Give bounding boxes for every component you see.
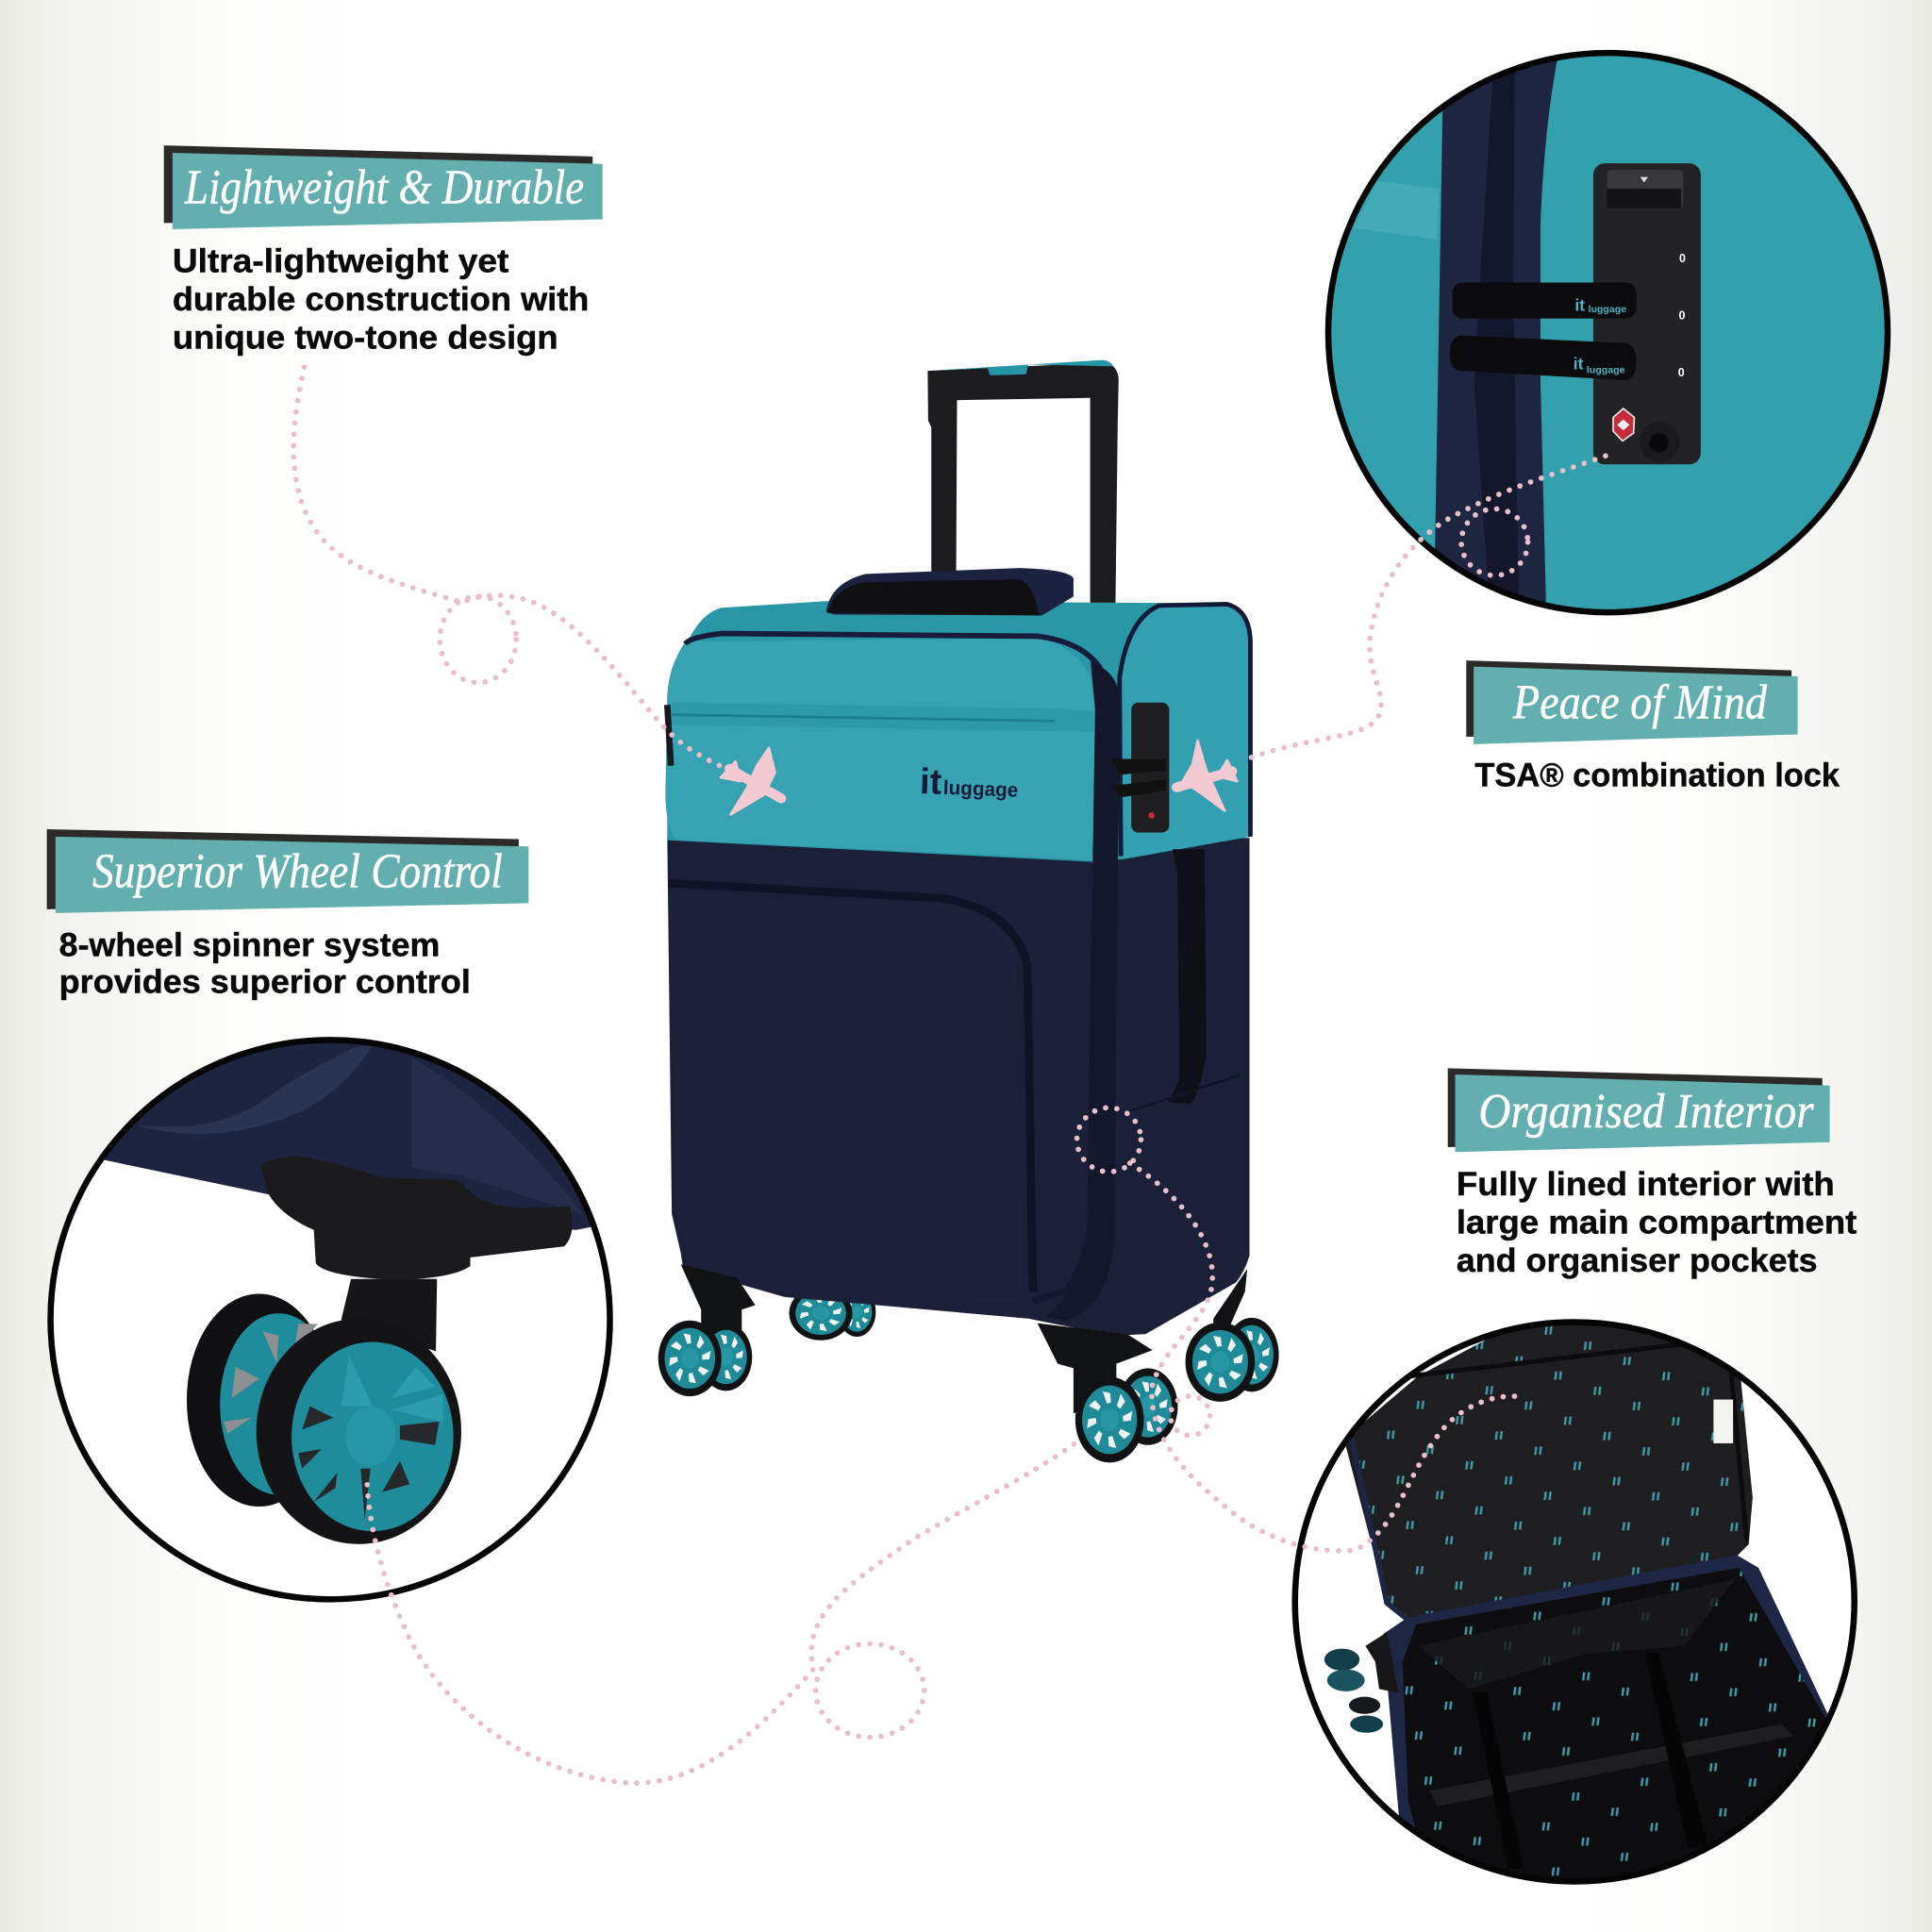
heading: Organised Interior xyxy=(1448,1068,1830,1152)
icon: tsa lock xyxy=(1110,703,1169,833)
zipper tag 1: it xyxy=(1574,295,1585,314)
text: Lightweight: durable construction with xyxy=(173,281,589,318)
text: TSA: TSA® combination lock xyxy=(1474,757,1840,793)
text: interior: large main compartment xyxy=(1457,1204,1857,1241)
pocket tab xyxy=(1353,181,1439,240)
wheel: front left xyxy=(658,1321,752,1396)
lock body: 0 xyxy=(1679,308,1686,322)
front navy pocket xyxy=(668,883,1097,1305)
lock body: 0 xyxy=(1678,366,1685,379)
panel: wheel photo xyxy=(47,1037,613,1603)
text: Lightweight xyxy=(173,243,589,357)
zipper tag 2: luggage xyxy=(1587,366,1625,376)
text: interior: Fully lined interior with xyxy=(1457,1166,1835,1203)
casters xyxy=(681,1264,1247,1413)
heading: Peace of Mind: Peace of Mind xyxy=(1512,675,1768,729)
white backdrop xyxy=(54,1160,162,1538)
rear wheel xyxy=(187,1294,318,1507)
zipper tag 2: it xyxy=(1574,355,1584,374)
logo: it luggage: luggage xyxy=(942,777,1019,802)
text: wheels: 8-wheel spinner system xyxy=(59,927,440,964)
text: wheels xyxy=(59,927,471,1001)
lock body xyxy=(1593,163,1701,464)
heading: Lightweight & Durable: Lightweight & Durable xyxy=(184,160,584,215)
dotted path: interior xyxy=(1077,1108,1524,1551)
lock body: 0 xyxy=(1679,252,1686,265)
body side seam xyxy=(1124,1074,1241,1113)
zipper tag 2 xyxy=(1450,335,1637,380)
wheel: front centre xyxy=(1075,1368,1177,1462)
main zipper column xyxy=(1046,662,1120,1321)
logo: it luggage xyxy=(919,761,1019,806)
zipper tag 1: luggage xyxy=(1589,305,1627,315)
suitcase xyxy=(658,360,1279,1462)
heading: Superior Wheel Control xyxy=(47,829,528,913)
wheel: front right xyxy=(1186,1318,1279,1402)
caster fork xyxy=(261,1157,573,1280)
caster stem xyxy=(341,1279,437,1351)
icon: telescopic handle xyxy=(927,360,1119,606)
open lid lining xyxy=(1346,1318,1753,1619)
text: interior: and organiser pockets xyxy=(1457,1242,1818,1279)
suitcase base lining xyxy=(1383,1556,1829,1912)
panel: lock photo xyxy=(1324,49,1890,615)
icon: plane right xyxy=(1176,741,1237,810)
dotted path: wheel xyxy=(367,1396,1210,1783)
front wheel xyxy=(257,1319,461,1544)
heading: Peace of Mind xyxy=(1466,660,1798,744)
zipper band xyxy=(1435,56,1558,615)
heading: Lightweight & Durable xyxy=(164,145,603,229)
suitcase navy body xyxy=(667,838,1250,1336)
logo: it luggage: it xyxy=(919,761,942,803)
text: interior xyxy=(1457,1166,1857,1279)
heading: Superior Wheel Control: Superior Wheel Control xyxy=(92,843,503,898)
text: Lightweight: Ultra-lightweight yet xyxy=(173,243,509,280)
side strap xyxy=(1168,849,1207,1105)
zipper tag 1 xyxy=(1453,283,1637,319)
navy fabric xyxy=(104,1043,591,1230)
teal fabric xyxy=(1331,56,1885,609)
teal base block xyxy=(667,601,1250,862)
small wheels xyxy=(1324,1632,1399,1733)
heading: Organised Interior: Organised Interior xyxy=(1478,1084,1814,1139)
dotted path: lock xyxy=(1247,456,1606,759)
care tag xyxy=(1713,1400,1733,1443)
back wheels xyxy=(790,1286,875,1341)
lining straps xyxy=(1473,1652,1707,1869)
carry handle xyxy=(826,568,1074,615)
teal side panel xyxy=(1120,604,1250,858)
text: wheels: provides superior control xyxy=(59,964,471,1001)
dotted path: lightweight xyxy=(293,367,729,770)
white backdrop xyxy=(1771,1407,1851,1713)
text: Lightweight: unique two-tone design xyxy=(173,320,558,357)
icon: plane left xyxy=(721,748,781,814)
panel: interior photo xyxy=(1291,1319,1857,1885)
teal front pocket xyxy=(665,634,1101,860)
